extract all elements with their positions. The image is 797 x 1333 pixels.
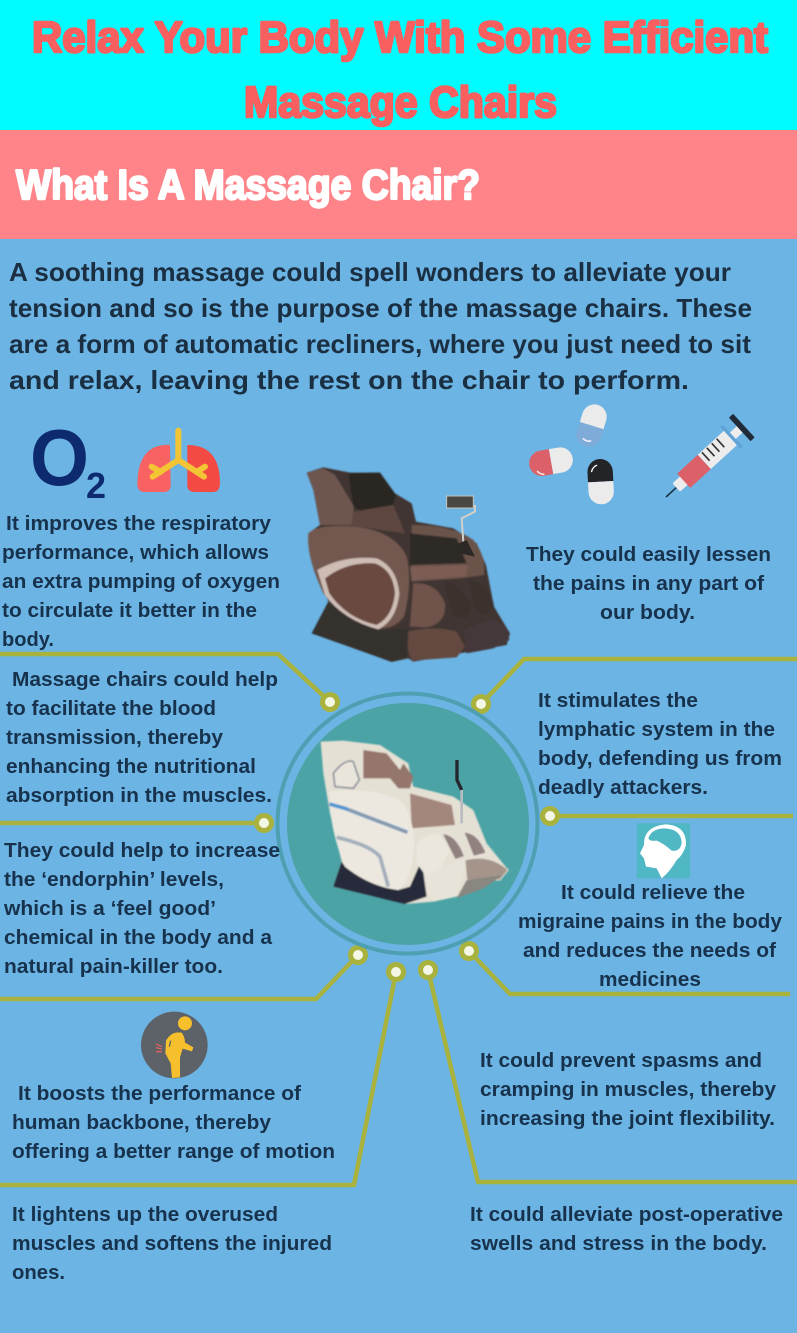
intro paragraph: A soothing massage could spell wonders to alleviate your xyxy=(9,257,731,287)
icon: head with brain xyxy=(637,823,690,878)
text: spasms and cramping: cramping in muscles, thereby xyxy=(480,1078,777,1101)
text: endorphin levels: which is a ‘feel good’ xyxy=(3,897,216,920)
text: overused muscles xyxy=(12,1203,332,1284)
text: human backbone: human backbone, thereby xyxy=(12,1111,272,1134)
title banner: Relax Your Body With Some Efficient xyxy=(32,13,768,62)
text: respiratory performance: an extra pumping of oxygen xyxy=(2,570,280,593)
text: respiratory performance xyxy=(2,512,280,651)
text: lymphatic system: It stimulates the xyxy=(538,689,698,712)
central circle xyxy=(278,694,538,954)
text: migraine pains: migraine pains in the body xyxy=(518,910,783,933)
intro paragraph: and relax, leaving the rest on the chair to perform. xyxy=(9,365,689,395)
text: spasms and cramping: It could prevent spasms and xyxy=(480,1049,762,1072)
section heading: what is a massage chair xyxy=(0,130,797,239)
text: migraine pains: It could relieve the xyxy=(561,881,745,904)
text: blood transmission: to facilitate the blood xyxy=(6,697,216,720)
text: human backbone: It boosts the performance of xyxy=(18,1082,301,1105)
text: overused muscles: It lightens up the overused xyxy=(12,1203,278,1226)
text: post-operative swells xyxy=(470,1203,783,1255)
text: lessen pains: the pains in any part of xyxy=(533,572,764,595)
intro paragraph: tension and so is the purpose of the massage chairs. These xyxy=(9,293,752,323)
icon: oxygen O2: O xyxy=(30,413,89,502)
intro paragraph: are a form of automatic recliners, where you just need to sit xyxy=(9,329,751,359)
text: respiratory performance: to circulate it better in the xyxy=(2,599,257,622)
text: lessen pains xyxy=(526,543,771,624)
text: endorphin levels xyxy=(3,839,280,978)
text: endorphin levels: chemical in the body and a xyxy=(4,926,273,949)
text: endorphin levels: natural pain-killer too. xyxy=(4,955,223,978)
text: lymphatic system: body, defending us from xyxy=(538,747,782,770)
icon: pills xyxy=(527,401,614,505)
text: post-operative swells: swells and stress in the body. xyxy=(470,1232,767,1255)
text: blood transmission: transmission, thereby xyxy=(6,726,224,749)
text: lymphatic system xyxy=(538,689,782,799)
text: blood transmission: Massage chairs could help xyxy=(12,668,278,691)
text: respiratory performance: body. xyxy=(2,628,54,651)
text: blood transmission: absorption in the muscles. xyxy=(6,784,272,807)
text: post-operative swells: It could alleviate post-operative xyxy=(470,1203,783,1226)
text: lessen pains: our body. xyxy=(600,601,695,624)
text: blood transmission: enhancing the nutritional xyxy=(6,755,256,778)
text: lymphatic system: lymphatic system in the xyxy=(538,718,775,741)
text: overused muscles: muscles and softens the injured xyxy=(12,1232,332,1255)
text: overused muscles: ones. xyxy=(12,1261,65,1284)
text: endorphin levels: the ‘endorphin’ levels, xyxy=(4,868,224,891)
title banner: Massage Chairs xyxy=(244,78,557,127)
text: migraine pains: and reduces the needs of xyxy=(523,939,776,962)
text: spasms and cramping xyxy=(480,1049,777,1130)
icon: white massage chair xyxy=(321,741,508,904)
text: lessen pains: They could easily lessen xyxy=(526,543,771,566)
text: respiratory performance: It improves the respiratory xyxy=(6,512,272,535)
text: endorphin levels: They could help to increase xyxy=(4,839,280,862)
section heading: what is a massage chair: What Is A Massage Chair? xyxy=(16,161,480,208)
intro paragraph xyxy=(9,257,752,395)
text: blood transmission xyxy=(6,668,278,807)
text: respiratory performance: performance, which allows xyxy=(2,541,269,564)
icon: lungs xyxy=(137,431,220,492)
connector lines and nodes xyxy=(0,654,797,1185)
icon: person with back pain xyxy=(141,1012,208,1078)
text: human backbone xyxy=(12,1082,335,1163)
icon: oxygen O2: 2 xyxy=(86,465,106,506)
text: human backbone: offering a better range of motion xyxy=(12,1140,335,1163)
text: migraine pains: medicines xyxy=(599,968,701,991)
text: spasms and cramping: increasing the joint flexibility. xyxy=(480,1107,775,1130)
icon: brown massage chair xyxy=(307,467,510,662)
title banner xyxy=(0,0,797,130)
icon: syringe xyxy=(655,414,755,509)
text: migraine pains xyxy=(518,881,783,991)
text: lymphatic system: deadly attackers. xyxy=(538,776,708,799)
